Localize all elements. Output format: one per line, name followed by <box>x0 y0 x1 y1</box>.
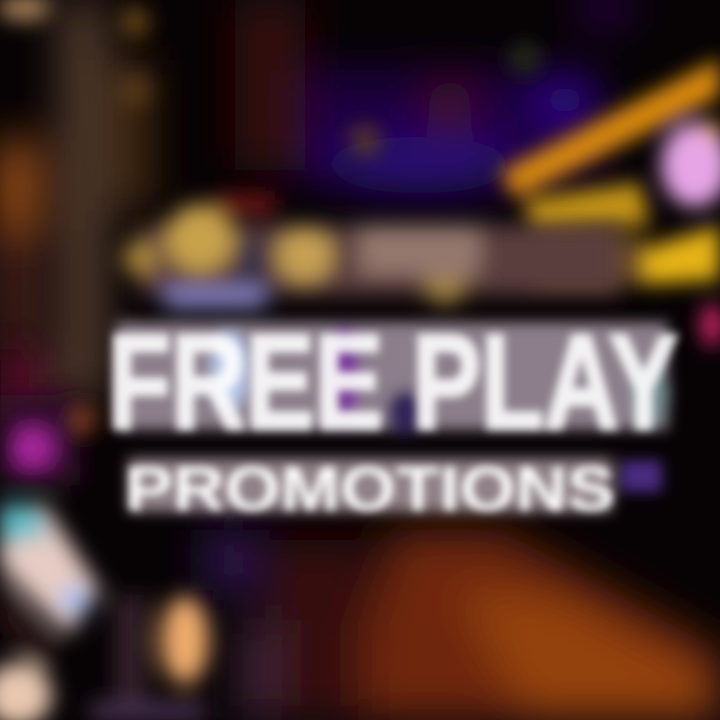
subtitle: Promotions: PROMOTIONS <box>125 455 615 524</box>
marquee sign upper right <box>500 58 720 347</box>
slot machines lower left <box>0 395 209 720</box>
ceiling lights <box>235 0 635 193</box>
floor carpet <box>205 530 720 720</box>
ceiling spots <box>0 0 539 154</box>
subtitle band <box>128 458 662 512</box>
gold emblem shapes above title <box>123 197 620 308</box>
left column and pillar <box>0 0 146 420</box>
title plate <box>116 322 670 436</box>
